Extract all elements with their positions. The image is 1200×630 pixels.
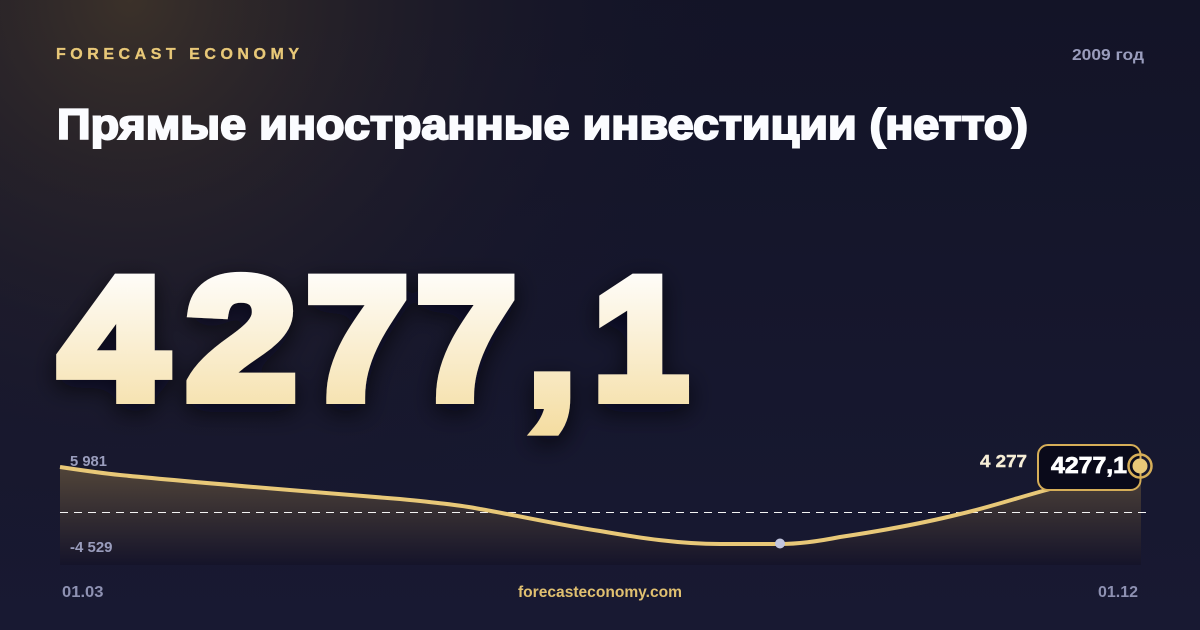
year label: 2009 год <box>1072 47 1144 64</box>
start date: 01.03 <box>62 584 104 601</box>
main value: 4 <box>60 242 167 435</box>
main value: 2 <box>186 243 296 435</box>
max label: 5 981 <box>70 453 107 470</box>
area chart <box>60 445 1152 565</box>
main value: 1 <box>594 243 688 435</box>
value callout <box>1038 445 1140 490</box>
end point marker <box>1128 454 1152 478</box>
end date: 01.12 <box>1098 584 1138 601</box>
main value: , <box>528 248 576 440</box>
brand label: FORECAST ECONOMY <box>56 46 299 63</box>
value callout: 4277,1 <box>1051 452 1127 478</box>
title: Прямые иностранные инвестиции (нетто) <box>57 102 1028 149</box>
min label: -4 529 <box>70 539 112 556</box>
chart area fill <box>60 466 1141 565</box>
chart line <box>60 466 1141 544</box>
main value <box>60 242 688 440</box>
last value label: 4 277 <box>980 451 1027 471</box>
source url: forecasteconomy.com <box>518 584 682 601</box>
zero reference dashed line <box>60 512 1146 514</box>
main value: 7 <box>417 243 516 435</box>
min point marker <box>775 538 785 548</box>
main value: 7 <box>307 243 408 435</box>
